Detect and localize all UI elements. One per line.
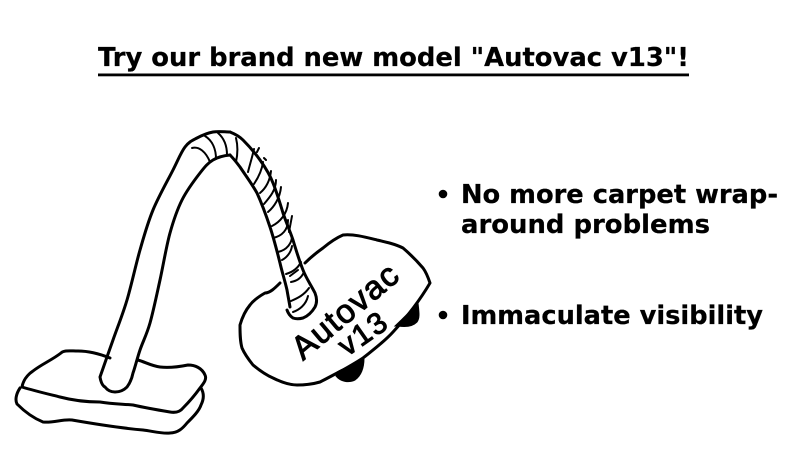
robot wheel front	[336, 358, 364, 382]
base plate top layer	[22, 351, 206, 412]
bullet: no more carpet wrap-around problems	[439, 180, 778, 240]
robot body outline	[240, 235, 430, 385]
vacuum handle	[100, 132, 230, 392]
title: Try our brand new model "Autovac v13"!	[98, 43, 689, 73]
hose ribs	[192, 133, 309, 312]
bullet: no more carpet wrap-around problems: around problems	[461, 210, 710, 240]
corrugated hose	[230, 132, 316, 319]
icon: robot vacuum Autovac v13	[240, 235, 430, 385]
robot label: Autovac	[284, 256, 406, 366]
base plate lower layer	[16, 388, 203, 433]
robot wheel rear	[395, 303, 419, 327]
bullet: immaculate visibility: Immaculate visibility	[461, 301, 763, 331]
robot label: v13	[332, 306, 394, 363]
bullet: no more carpet wrap-around problems: No more carpet wrap-	[461, 180, 778, 210]
icon: old upright vacuum with handle and base plate	[16, 132, 316, 433]
